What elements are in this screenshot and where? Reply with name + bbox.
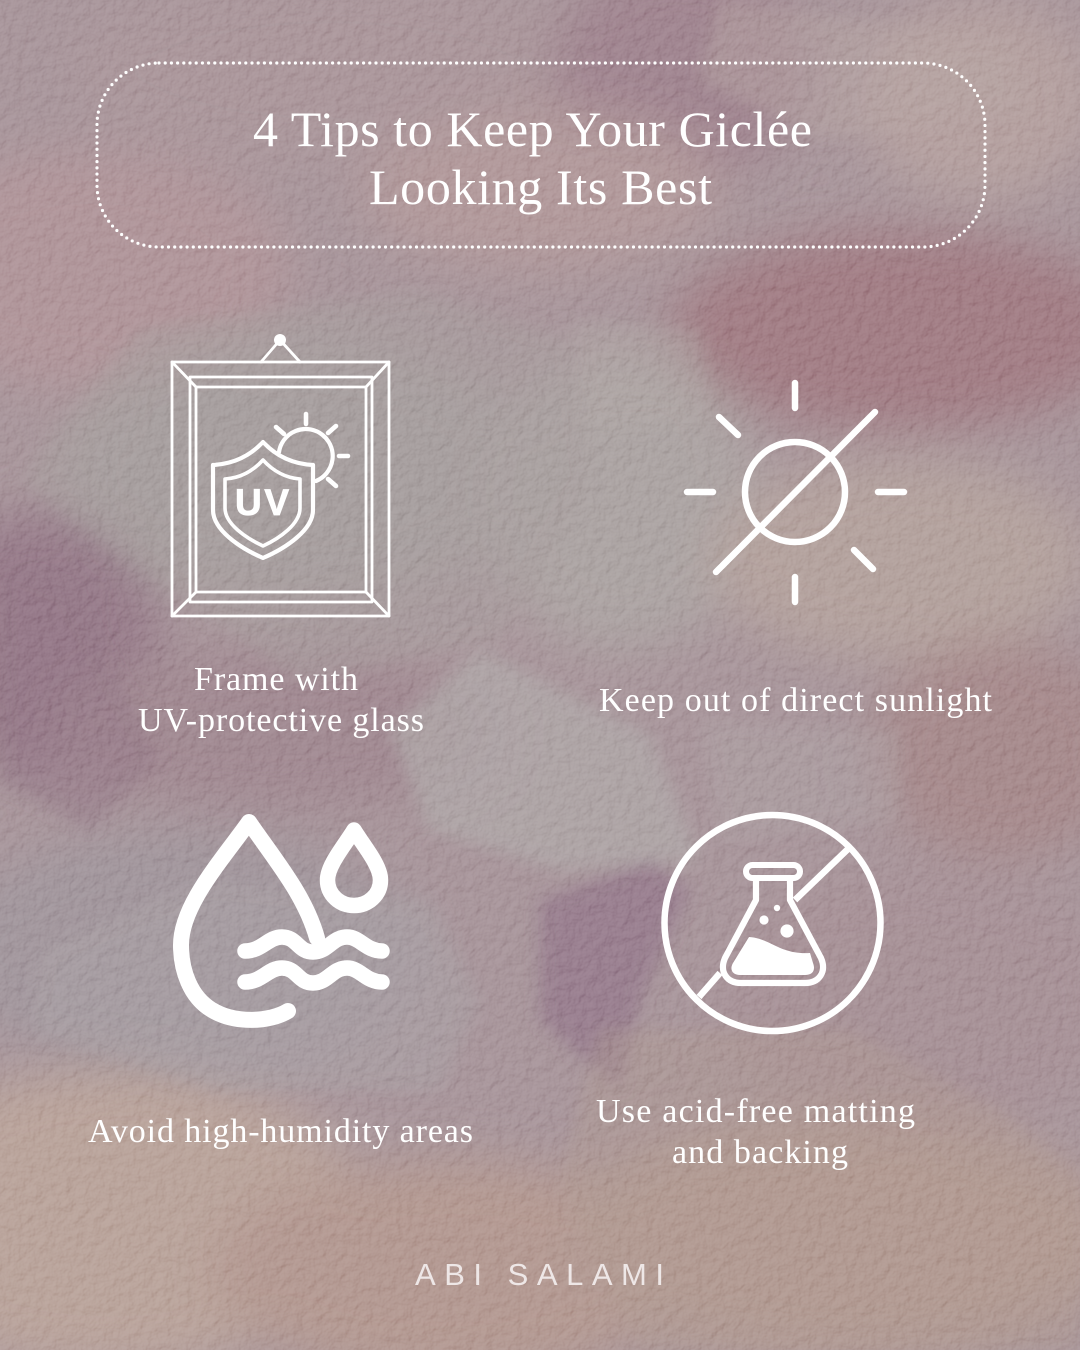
label: frame with UV-protective glass: UV-protective glass xyxy=(138,702,424,739)
label: frame with UV-protective glass: Frame with xyxy=(194,661,358,698)
title: Looking Its Best xyxy=(369,159,712,215)
footer: brand name: ABI SALAMI xyxy=(415,1257,664,1292)
label: keep out of direct sunlight: Keep out of direct sunlight xyxy=(599,682,993,719)
icon: no chemicals flask xyxy=(664,815,880,1031)
icon: water drops and humidity waves xyxy=(181,822,382,1020)
label: avoid high-humidity areas: Avoid high-humidity areas xyxy=(88,1113,473,1150)
title box xyxy=(97,63,985,247)
icon: framed UV protection glass: UV xyxy=(235,482,289,523)
icon: framed UV protection glass xyxy=(172,334,389,616)
icon: crossed-out sun xyxy=(687,383,904,602)
label: use acid-free matting and backing: Use acid-free matting xyxy=(596,1093,915,1130)
label: use acid-free matting and backing: and backing xyxy=(672,1134,848,1171)
title: 4 Tips to Keep Your Giclée xyxy=(253,101,812,157)
